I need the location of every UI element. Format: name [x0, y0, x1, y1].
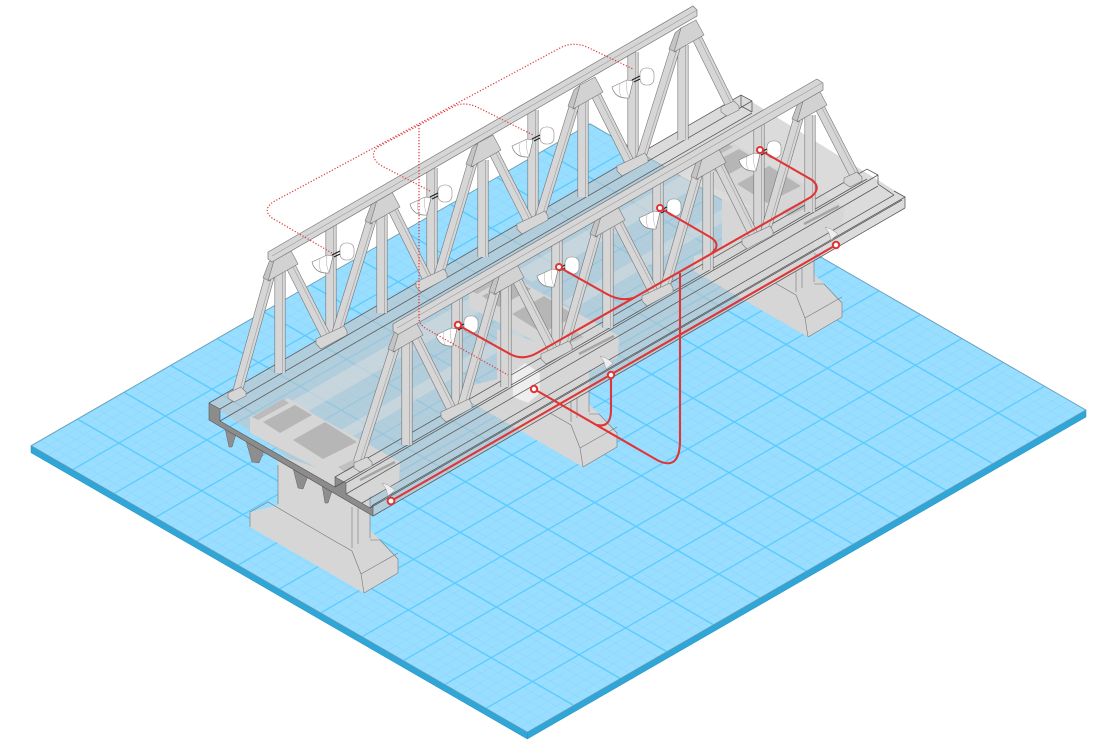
- far truss top chord: [268, 6, 697, 262]
- dotted control wires: [267, 44, 633, 375]
- water plane with grid: [31, 124, 1086, 739]
- far truss bottom plates: [228, 101, 739, 402]
- far truss: [228, 6, 739, 402]
- far truss diagonals: [237, 36, 732, 393]
- near truss gussets: [388, 90, 827, 352]
- deck edge lines: [209, 95, 905, 516]
- near truss verticals: [407, 115, 812, 445]
- far speakers: [312, 68, 654, 273]
- near speakers: [436, 141, 781, 346]
- light junction box: [512, 363, 540, 403]
- deck front face: [209, 403, 373, 516]
- far truss verticals: [280, 45, 686, 373]
- deck ribs: [225, 428, 332, 503]
- near truss top chord: [393, 79, 823, 334]
- near truss diagonals: [358, 106, 858, 462]
- far truss gussets: [263, 20, 704, 281]
- pale deck bands: [290, 162, 761, 439]
- under-deck speakers: [382, 227, 838, 496]
- pier: middle: [469, 272, 619, 467]
- deck surface: [209, 95, 905, 516]
- wire terminals: [388, 147, 839, 504]
- red power wires: [391, 150, 836, 501]
- near truss: [354, 79, 862, 472]
- pier: near: [250, 398, 400, 593]
- pier: far: [694, 142, 844, 337]
- near truss bottom plates: [354, 172, 862, 472]
